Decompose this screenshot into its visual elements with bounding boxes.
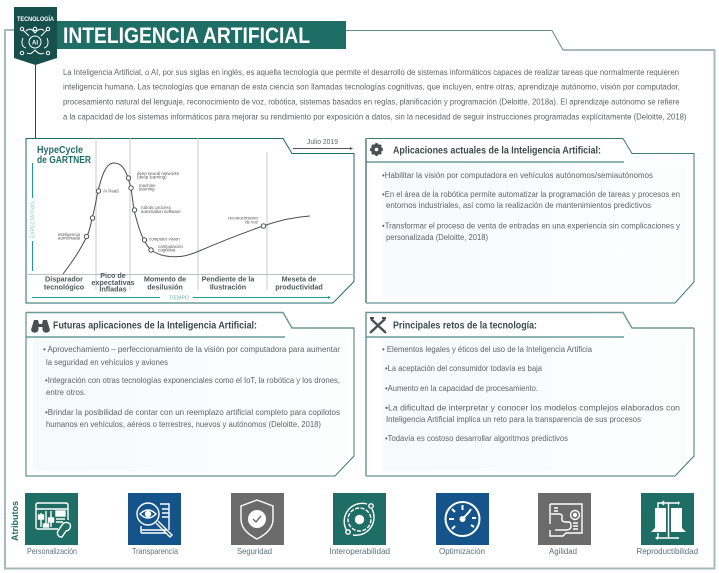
- point labels: learning: [139, 186, 155, 192]
- label: Transparencia: [132, 546, 178, 556]
- attribute: seguridad: [231, 493, 284, 556]
- attributes heading: Atributos: [10, 501, 21, 541]
- stage labels: Ilustración: [210, 282, 246, 292]
- icon: gear: [370, 143, 383, 156]
- label: Personalización: [27, 546, 77, 556]
- attribute: interoperabilidad: [330, 493, 390, 556]
- bullet list: entre otros.: [46, 387, 86, 397]
- stage labels: [44, 271, 323, 294]
- chart title: de GARTNER: [37, 155, 92, 166]
- intro text block: inteligencia humana. Las tecnologías que emanan de esta ciencia son llamadas tecnologías cognitivas, que incluyen, entre otras, aprendizaje autónomo, visión por computador,: [63, 82, 680, 92]
- attribute: agilidad: [538, 493, 591, 556]
- label: Interoperabilidad: [330, 546, 390, 556]
- connector line: [34, 65, 36, 138]
- stage labels: Infladas: [99, 284, 127, 294]
- point labels: computación: [158, 244, 183, 249]
- point labels: robotic process: [141, 205, 172, 210]
- badge: tecnología: TECNOLOGÍA: [17, 14, 54, 23]
- panel: futuras aplicaciones: [26, 312, 354, 476]
- bullet list: •La dificultad de interpretar y conocer los modelos complejos elaborados con: [385, 402, 680, 412]
- icon: gear with orbit: [344, 503, 374, 535]
- point labels: inteligencia: [58, 232, 81, 237]
- hype cycle chart: [26, 138, 354, 302]
- bullet list: •Brindar la posibilidad de contar con un reemplazo artificial completo para copilotos: [45, 407, 340, 417]
- bullet list: •Todavía es costoso desarrollar algoritmos predictivos: [385, 433, 568, 443]
- chart title: [37, 145, 92, 166]
- badge: tecnología: [14, 7, 57, 65]
- bullet list: humanos en vehículos, aéreos o terrestres, nuevos y autónomos (Deloitte, 2018): [46, 419, 321, 429]
- point labels: cognitiva: [158, 248, 176, 252]
- bullet list: [43, 344, 340, 429]
- attribute: optimización: [436, 493, 489, 556]
- axis: tiempo: [32, 296, 331, 302]
- point labels: machine: [139, 183, 156, 188]
- bullet list: [382, 170, 681, 242]
- icon: magnifier with eye: [137, 503, 172, 537]
- axis: tiempo: TIEMPO: [169, 296, 190, 302]
- panel: aplicaciones actuales: [366, 138, 694, 303]
- bullet list: •Habilitar la visión por computadora en vehículos autónomos/semiautónomos: [382, 170, 653, 180]
- heading: Aplicaciones actuales de la Inteligencia Artificial:: [393, 146, 601, 156]
- attribute: reproductibilidad: [636, 493, 698, 556]
- attribute: transparencia: [128, 493, 181, 556]
- stage labels: Pendiente de la: [202, 274, 255, 284]
- bullet list: personalizada (Deloitte, 2018): [386, 232, 488, 242]
- icon: AI network: AI: [32, 40, 38, 46]
- intro text block: [63, 67, 687, 122]
- label: Seguridad: [237, 546, 272, 556]
- point labels: automation software: [141, 209, 181, 214]
- bullet list: •Aumento en la capacidad de procesamiento.: [385, 383, 538, 393]
- label: Agilidad: [549, 546, 577, 556]
- panel: hype cycle: [26, 137, 354, 303]
- bullet list: la seguridad en vehículos y aviones: [46, 357, 168, 367]
- title bar: INTELIGENCIA ARTIFICIAL: [63, 23, 310, 48]
- chart title: HypeCycle: [37, 145, 83, 156]
- icon: crossed tools: [370, 318, 386, 333]
- point labels: computer vision: [149, 236, 180, 242]
- stage labels: tecnológico: [44, 282, 85, 292]
- bullet list: Inteligencia Artificial implica un reto para la transparencia de sus procesos: [386, 414, 641, 424]
- point labels: aumentada: [58, 236, 81, 240]
- icon: mirrored devices: [651, 501, 686, 540]
- point labels: AI PaaS: [103, 188, 119, 194]
- axis: expectativas: EXPECTATIVAS: [30, 201, 36, 238]
- stage labels: Meseta de: [282, 274, 316, 284]
- icon: shield: [241, 500, 273, 539]
- bullet list: •En el área de la robótica permite automatizar la programación de tareas y procesos en: [382, 189, 680, 199]
- icon: binoculars: [31, 320, 50, 333]
- heading: Futuras aplicaciones de la Inteligencia Artificial:: [53, 320, 257, 332]
- bullet list: • Elementos legales y éticos del uso de la Inteligencia Artificia: [382, 344, 592, 354]
- axis: expectativas: [30, 163, 36, 271]
- icon: gauge: [446, 502, 480, 536]
- bullet list: entornos industriales, así como la realización de mantenimientos predictivos: [386, 200, 651, 210]
- point labels: [58, 171, 259, 252]
- icon: process board: [550, 504, 582, 536]
- icon: sliders and wrench: [36, 503, 70, 537]
- point labels: (deep learning): [137, 174, 167, 180]
- point labels: de voz: [245, 220, 258, 224]
- date label: Julio 2019: [307, 137, 338, 146]
- bullet list: •Integración con otras tecnologías exponenciales como el IoT, la robótica y los drones,: [45, 375, 340, 385]
- heading: Principales retos de la tecnología:: [393, 320, 537, 332]
- attribute: personalización: [25, 493, 78, 556]
- bullet list: •La aceptación del consumidor todavía es baja: [385, 363, 542, 373]
- label: Reproductibilidad: [636, 546, 698, 556]
- stage labels: Disparador: [45, 274, 83, 284]
- label: Optimización: [439, 546, 485, 556]
- bullet list: •Transformar el proceso de venta de entradas en una experiencia sin complicaciones y: [382, 220, 681, 230]
- bullet list: [382, 344, 680, 443]
- point labels: reconocimiento: [228, 216, 259, 220]
- stage labels: Pico de: [100, 271, 126, 280]
- stage labels: expectativas: [91, 278, 135, 287]
- bullet list: • Aprovechamiento – perfeccionamiento de la visión por computadora para aumentar: [43, 344, 340, 354]
- panel: principales retos: [366, 312, 694, 476]
- stage labels: productividad: [275, 282, 323, 292]
- point labels: deep neural networks: [137, 171, 180, 176]
- stage labels: Momento de: [144, 274, 186, 284]
- stage labels: desilusión: [147, 282, 183, 292]
